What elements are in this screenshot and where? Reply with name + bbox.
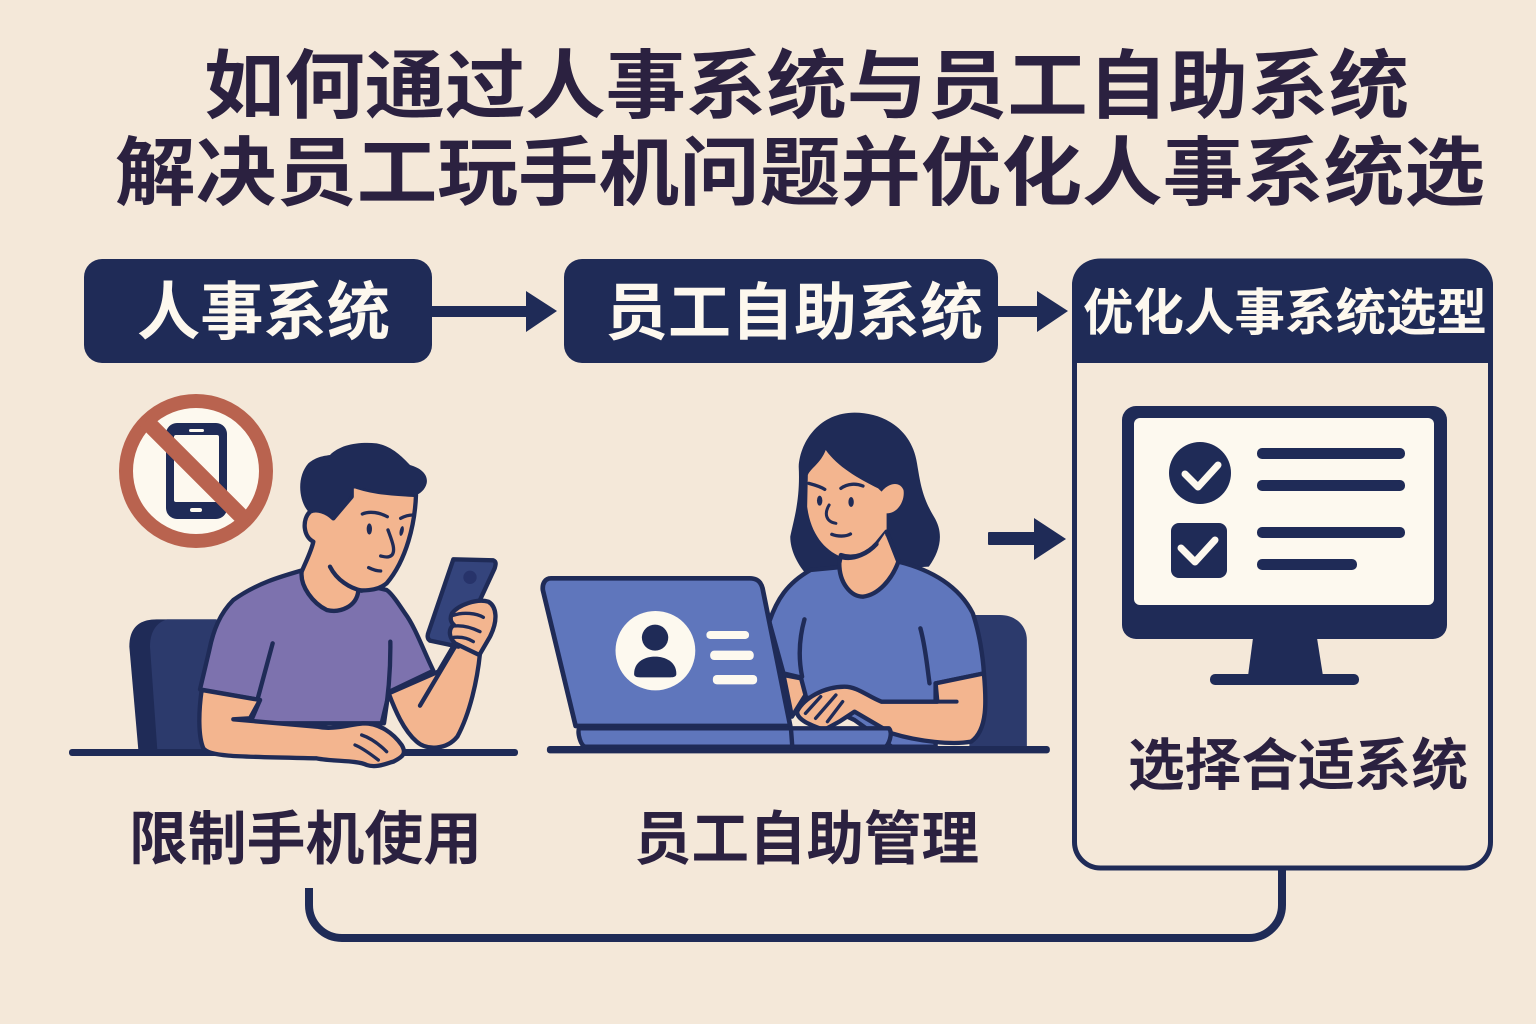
laptop screen xyxy=(543,578,790,726)
caption: 员工自助管理: 员工自助管理 xyxy=(634,807,979,872)
phone xyxy=(428,559,496,647)
icon: no phone sign xyxy=(126,401,266,541)
icon: monitor with checklist xyxy=(1122,406,1447,685)
panel heading: 优化人事系统选型 xyxy=(1083,285,1487,341)
back hair xyxy=(790,413,940,573)
neck fill xyxy=(843,533,893,587)
title: 解决员工玩手机问题并优化人事系统选 xyxy=(115,131,1485,215)
left arm sliver xyxy=(784,675,805,717)
chair xyxy=(969,615,1027,748)
chair xyxy=(129,619,217,750)
eyes xyxy=(817,496,854,507)
chin line xyxy=(843,544,876,558)
profile icon xyxy=(616,611,757,690)
table line middle xyxy=(547,746,1050,753)
brows xyxy=(362,512,413,518)
nose xyxy=(381,530,394,557)
step 2 header: 员工自助系统: 员工自助系统 xyxy=(605,279,983,348)
mouth xyxy=(832,534,850,536)
table line left xyxy=(69,749,518,756)
neck xyxy=(839,532,898,597)
panel: optimise system selection xyxy=(1072,259,1493,868)
arrow: step 1 to step 2 xyxy=(432,291,557,332)
right arm xyxy=(389,643,480,748)
mouth xyxy=(369,568,381,571)
shirt xyxy=(200,570,433,723)
panel caption: 选择合适系统 xyxy=(1128,734,1468,797)
right arm and hand xyxy=(797,673,985,743)
caption: 限制手机使用: 限制手机使用 xyxy=(129,807,482,872)
finger lines xyxy=(805,695,843,722)
feedback connector xyxy=(309,868,1282,938)
eyes xyxy=(367,523,405,536)
finger lines xyxy=(355,735,387,760)
hand on phone xyxy=(450,601,495,655)
sleeve creases xyxy=(800,619,930,683)
arm crease xyxy=(882,696,957,708)
arrow: woman to monitor xyxy=(988,518,1066,560)
nose xyxy=(826,505,836,523)
brows xyxy=(809,483,863,489)
finger lines xyxy=(453,613,483,642)
hair xyxy=(300,443,427,519)
forearm crease xyxy=(420,647,455,706)
title xyxy=(115,44,1485,215)
left arm xyxy=(199,690,404,766)
step 1 header: 人事系统 xyxy=(84,259,432,363)
illustration: man using phone xyxy=(69,443,518,766)
step 2 header: 员工自助系统 xyxy=(564,259,998,363)
title: 如何通过人事系统与员工自助系统 xyxy=(204,44,1409,128)
step 1 header: 人事系统: 人事系统 xyxy=(137,278,390,348)
chin line xyxy=(330,567,362,591)
sleeve creases xyxy=(257,642,390,723)
laptop base xyxy=(579,728,891,747)
phone camera xyxy=(463,571,477,584)
illustration: woman at laptop xyxy=(543,413,1050,753)
shirt xyxy=(769,562,984,747)
face and neck xyxy=(302,485,416,611)
arrow: step 2 to step 3 xyxy=(998,291,1068,332)
face and ear xyxy=(807,450,904,557)
